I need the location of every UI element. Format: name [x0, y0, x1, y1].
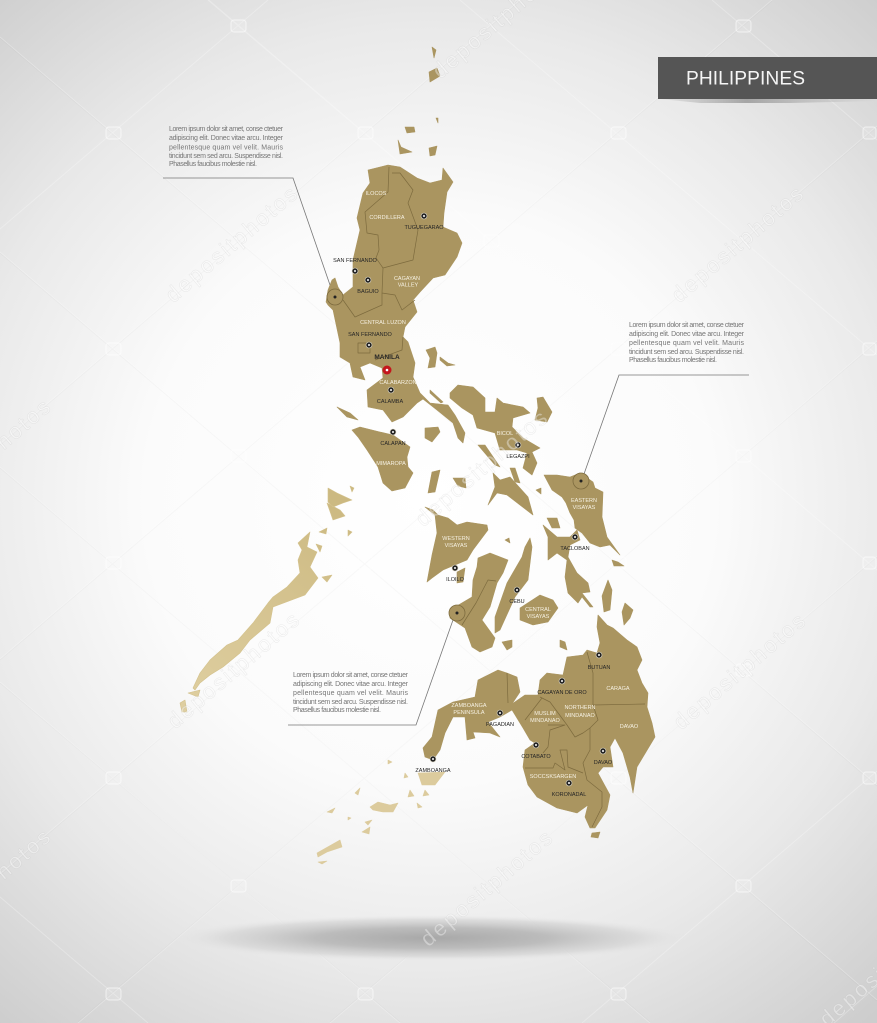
region labels: SOCCSKSARGEN — [530, 774, 576, 780]
callout text: Lorem ipsum dolor sit amet, conse ctetuer — [169, 126, 284, 133]
city labels: TACLOBAN — [560, 546, 590, 552]
region labels: CENTRAL LUZON — [360, 320, 406, 326]
region labels: BICOL — [497, 431, 513, 437]
callout: eastern Visayas — [573, 322, 749, 489]
city labels: CAGAYAN DE ORO — [537, 690, 587, 696]
watermark text: depositphotos — [160, 181, 302, 307]
watermark text: depositphotos — [162, 607, 304, 733]
Polillo and nearby islands — [426, 347, 455, 368]
city labels: MANILA — [374, 354, 400, 361]
Cebu — [495, 538, 532, 633]
city labels: BAGUIO — [357, 289, 379, 295]
region labels: PENINSULA — [453, 710, 485, 716]
watermark text: depositphotos — [410, 405, 552, 531]
Bicol peninsula — [450, 385, 540, 475]
city markers — [352, 213, 606, 786]
Palawan group — [180, 486, 354, 712]
city labels: KORONADAL — [552, 792, 586, 798]
city labels: CALAPAN — [380, 441, 406, 447]
Luzon — [326, 165, 465, 443]
Mindanao — [423, 615, 655, 828]
callout text: Lorem ipsum dolor sit amet, conse ctetuer — [293, 672, 409, 679]
city labels: DAVAO — [594, 760, 613, 766]
city labels: BUTUAN — [588, 665, 610, 671]
city labels: ZAMBOANGA — [415, 768, 451, 774]
region labels: DAVAO — [620, 724, 639, 730]
city labels: CEBU — [509, 599, 525, 605]
Romblon and Sibuyan — [428, 470, 466, 493]
region labels: CALABARZON — [379, 380, 417, 386]
Catanduanes — [535, 397, 552, 422]
islands near Surigao and Dinagat — [602, 580, 633, 625]
region labels: VALLEY — [398, 282, 419, 288]
Sulu archipelago — [317, 760, 445, 864]
callout text: tincidunt sem sed arcu. Suspendisse nisl. — [629, 349, 744, 356]
city labels: CALAMBA — [377, 399, 403, 405]
city labels: COTABATO — [521, 754, 551, 760]
Panay — [425, 507, 488, 582]
Sarangani — [591, 832, 600, 838]
region labels: EASTERN — [571, 498, 597, 504]
Guimaras — [457, 568, 465, 583]
callout text: Phasellus faucibus molestie nisl. — [293, 707, 381, 714]
callout text: tincidunt sem sed arcu. Suspendisse nisl. — [169, 153, 283, 160]
callout text: pellentesque quam vel velit. Mauris — [169, 144, 284, 152]
region labels: CAGAYAN — [394, 276, 420, 282]
Mindoro — [352, 427, 413, 491]
callout text: Phasellus faucibus molestie nisl. — [629, 357, 717, 364]
region labels: NORTHERN — [564, 705, 596, 711]
watermark text: depositphotos — [415, 825, 557, 951]
callout text: tincidunt sem sed arcu. Suspendisse nisl. — [293, 699, 408, 706]
callout text: pellentesque quam vel velit. Mauris — [293, 690, 408, 697]
callout text — [629, 322, 745, 364]
region labels: WESTERN — [442, 536, 470, 542]
callout text: adipiscing elit. Donec vitae arcu. Integer — [629, 331, 745, 338]
callout text: Lorem ipsum dolor sit amet, conse ctetuer — [629, 322, 745, 329]
Bohol — [520, 595, 558, 625]
city labels: SAN FERNANDO — [333, 258, 378, 264]
Siquijor and Camiguin — [502, 640, 567, 650]
city labels: TUGUEGARAO — [404, 225, 444, 231]
title banner — [658, 57, 877, 103]
Lubang — [337, 407, 358, 420]
region labels: ILOCOS — [366, 191, 387, 197]
callout text — [293, 672, 409, 714]
city labels: PAGADIAN — [486, 722, 514, 728]
Negros — [450, 553, 508, 652]
region labels: VISAYAS — [445, 543, 468, 549]
region labels: CORDILLERA — [369, 215, 405, 221]
Samar — [544, 473, 620, 555]
region labels: ZAMBOANGA — [451, 703, 487, 709]
callout text: pellentesque quam vel velit. Mauris — [629, 340, 744, 347]
map of the Philippines — [180, 47, 655, 864]
watermark text: depositphotos — [668, 608, 810, 734]
callout text: adipiscing elit. Donec vitae arcu. Integer — [293, 681, 409, 688]
city labels: LEGAZPI — [506, 454, 530, 460]
city labels: SAN FERNANDO — [348, 332, 393, 338]
region labels: MINDANAO — [530, 718, 561, 724]
callout: Negros — [288, 605, 465, 725]
region labels: CARAGA — [606, 686, 630, 692]
title banner: PHILIPPINES — [686, 68, 805, 90]
Leyte — [543, 525, 593, 607]
watermark text: depositphotos — [666, 181, 808, 307]
Alabat and Bondoc strip — [430, 390, 443, 403]
Babuyan and Batanes islands — [398, 47, 440, 156]
region labels: VISAYAS — [573, 505, 596, 511]
Burias and Ticao — [478, 445, 520, 483]
capital marker: Manila — [382, 366, 392, 374]
region labels: MIMAROPA — [376, 461, 406, 467]
region labels: CENTRAL — [525, 607, 551, 613]
callout: northern Luzon — [163, 126, 343, 305]
city labels: ILOILO — [446, 577, 465, 583]
Biliran and small islets — [470, 488, 624, 566]
region labels: MINDANAO — [565, 713, 596, 719]
region labels: VISAYAS — [527, 614, 550, 620]
callout text — [169, 126, 284, 168]
Marinduque — [425, 427, 440, 442]
region labels — [360, 191, 639, 780]
ground shadow — [174, 915, 690, 961]
region labels: MUSLIM — [534, 711, 556, 717]
Masbate — [488, 473, 533, 515]
callout text: adipiscing elit. Donec vitae arcu. Integer — [169, 135, 284, 142]
city labels — [333, 225, 613, 798]
callout text: Phasellus faucibus molestie nisl. — [169, 161, 257, 168]
